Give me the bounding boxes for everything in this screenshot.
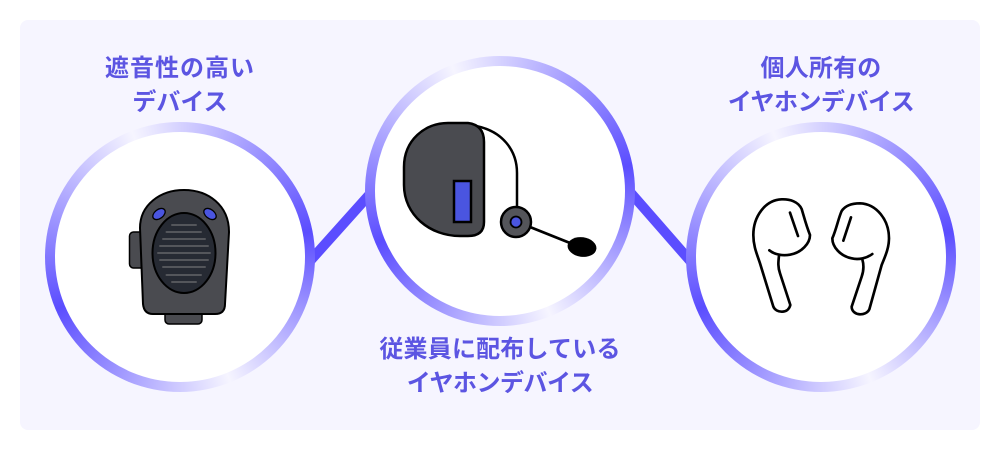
heading: noise-isolating devices: デバイス [132, 89, 228, 116]
heading: employee-issued earphones [379, 336, 621, 397]
circle: right device ring [686, 122, 956, 392]
circle: center device ring [365, 56, 635, 326]
heading: personally owned earphones [728, 55, 914, 116]
circle: left device ring [45, 122, 315, 392]
heading: employee-issued earphones: イヤホンデバイス [407, 370, 593, 397]
heading: personally owned earphones: イヤホンデバイス [728, 89, 914, 116]
heading: personally owned earphones: 個人所有の [760, 55, 882, 82]
heading: employee-issued earphones: 従業員に配布している [379, 336, 621, 363]
heading: noise-isolating devices [105, 55, 255, 116]
heading: noise-isolating devices: 遮音性の高い [105, 55, 255, 82]
